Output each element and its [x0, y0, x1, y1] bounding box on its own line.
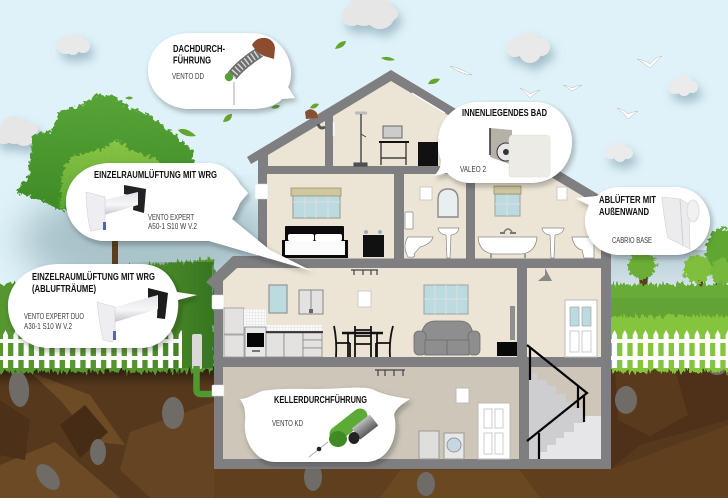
- model name: CABRIO BASE: [612, 235, 652, 245]
- heading second line: AUßENWAND: [599, 206, 649, 218]
- attic dresser: [418, 142, 438, 166]
- living room window: [424, 285, 468, 314]
- stones: [7, 361, 726, 496]
- cloud right: [668, 75, 698, 96]
- cloud top left: [57, 34, 90, 55]
- product: wall ventilator: [86, 185, 146, 231]
- model name: VENTO DD: [172, 71, 204, 81]
- bed: [282, 226, 348, 258]
- heading: DACHDURCH-: [173, 43, 225, 55]
- cloud upper right: [506, 32, 550, 63]
- ceiling light: [351, 270, 378, 275]
- model name: VENTO KD: [272, 418, 303, 428]
- basement ceiling light: [375, 370, 405, 376]
- dryer: [419, 431, 439, 459]
- bathroom with mirror, sink, toilet: [405, 187, 459, 258]
- birds: [450, 56, 662, 119]
- tree: [628, 253, 656, 316]
- door hall: [565, 300, 597, 357]
- tree left: [16, 95, 195, 268]
- product: wall ventilator: [97, 288, 168, 342]
- sink: [438, 228, 459, 258]
- basement rooms: [223, 367, 601, 459]
- basement white panel: [456, 388, 469, 403]
- attic rooms: [268, 81, 475, 166]
- heading second line: FÜHRUNG: [173, 54, 211, 66]
- heading: KELLERDURCHFÜHRUNG: [274, 393, 367, 406]
- wall picture: [557, 187, 567, 200]
- bubble: roof duct: [148, 33, 295, 109]
- stove: [245, 327, 266, 357]
- basement pipe: [192, 334, 216, 394]
- product: bathroom fan: [490, 128, 550, 177]
- bubble: interior bathroom: [434, 102, 572, 183]
- kitchen window: [269, 285, 287, 313]
- bubble: single room ventilation: [66, 163, 312, 271]
- bathroom two window: [494, 186, 521, 216]
- first floor rooms: [267, 174, 601, 258]
- wall cabinet: [299, 290, 323, 314]
- washer: [444, 433, 464, 459]
- bubble: basement duct: [240, 388, 410, 462]
- grass left: [0, 258, 214, 372]
- model line two: A30-1 S10 W V.2: [24, 321, 72, 331]
- desk and monitor: [379, 126, 409, 165]
- heading: INNENLIEGENDES BAD: [462, 107, 547, 119]
- ground floor rooms: [223, 268, 601, 357]
- leaves: [125, 41, 440, 136]
- model line one: VENTO EXPERT: [148, 212, 194, 222]
- roof cap and elbow: [305, 109, 325, 128]
- product: basement duct set: [309, 416, 374, 457]
- house: [206, 70, 611, 469]
- product: wall fan: [662, 197, 699, 249]
- wall picture: [420, 187, 432, 200]
- bathtub: [478, 229, 537, 258]
- heading: EINZELRAUMLÜFTUNG MIT WRG: [32, 270, 155, 283]
- chandelier: [538, 268, 552, 281]
- bubble: exhaust fan outer wall: [575, 187, 710, 255]
- TV: [497, 306, 517, 356]
- soil patches: [0, 366, 728, 498]
- picket fence left: [0, 330, 182, 368]
- wall vents: [212, 122, 335, 396]
- product: roof vent hose: [225, 38, 275, 105]
- bedroom window: [291, 188, 341, 218]
- kitchen units: [266, 332, 323, 357]
- heading: ABLÜFTER MIT: [599, 193, 656, 206]
- house shell: [206, 70, 611, 469]
- picket fence right: [611, 330, 728, 368]
- basement door: [478, 403, 510, 459]
- toilet: [572, 237, 594, 258]
- tiles: [244, 309, 322, 331]
- sky band and trees right: [611, 228, 728, 316]
- nightstand: [363, 230, 384, 257]
- cloud left: [0, 116, 38, 146]
- cloud top centre: [342, 0, 398, 29]
- model line two: A50-1 S10 W V.2: [148, 221, 197, 231]
- heading: EINZELRAUMLÜFTUNG MIT WRG: [94, 168, 217, 181]
- grass right: [606, 284, 728, 372]
- fridge: [224, 308, 244, 357]
- bubble: exhaust rooms: [8, 264, 197, 348]
- skylight: [412, 93, 445, 113]
- dining table and chairs: [334, 326, 393, 357]
- toilet: [405, 212, 433, 257]
- sofa: [414, 321, 480, 355]
- heading second line: (ABLUFTRÄUME): [32, 282, 96, 295]
- tree: [683, 228, 728, 316]
- model line one: VENTO EXPERT DUO: [24, 311, 84, 321]
- sink: [542, 228, 564, 258]
- white panel: [358, 291, 371, 307]
- model name: VALEO 2: [460, 164, 486, 174]
- floor lamp: [354, 113, 367, 166]
- cloud lower right: [605, 142, 633, 162]
- ground: [0, 361, 728, 498]
- mirror: [438, 189, 458, 217]
- stairs: [527, 345, 601, 459]
